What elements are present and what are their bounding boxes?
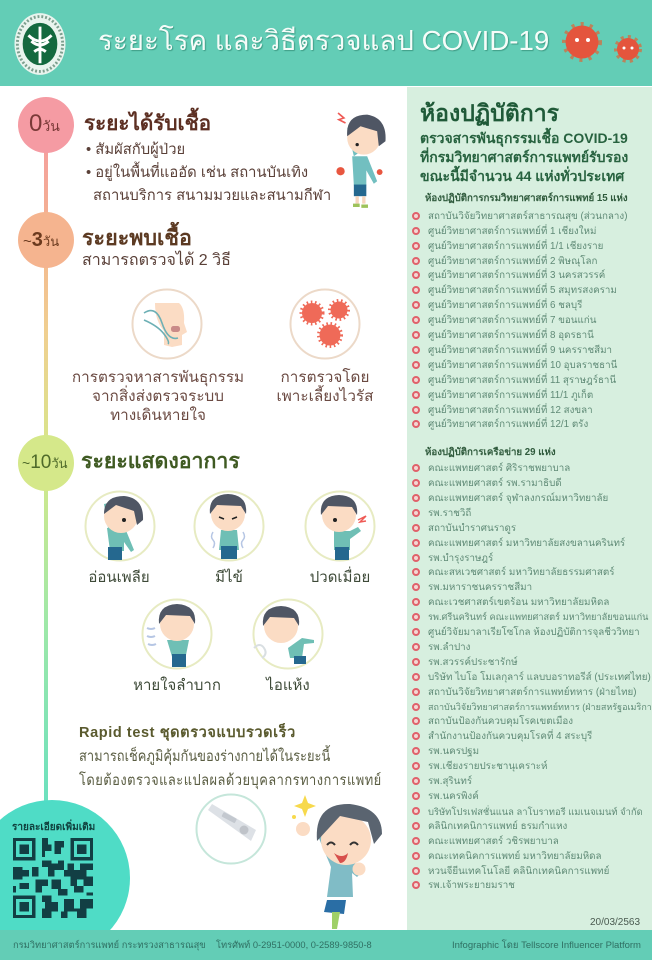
list: network labs: คณะเทคนิคการแพทย์ มหาวิทยาลัยมหิดล (428, 851, 602, 862)
icon: QR code (13, 838, 93, 918)
text: exposure bullets (86, 142, 331, 204)
icon: happy boy (292, 795, 382, 929)
list: department labs: ศูนย์วิทยาศาสตร์การแพทย์ที่ 8 อุดรธานี (428, 330, 594, 341)
symptom: dry cough (252, 598, 324, 670)
footer credit: Infographic โดย Tellscore Influencer Platform (452, 940, 641, 951)
label: shortness of breath: หายใจลำบาก (133, 677, 221, 694)
list: network labs: คณะแพทยศาสตร์ วชิรพยาบาล (428, 836, 559, 847)
text: rapid test description (79, 745, 382, 790)
label: dry cough: ไอแห้ง (266, 677, 310, 694)
list: network labs: สถาบันป้องกันควบคุมโรคเขตเมือง (428, 716, 573, 727)
list: network labs: รพ.เจ้าพระยายมราช (428, 880, 515, 891)
icon: ministry of public health seal (14, 13, 66, 75)
lab subheading (420, 128, 628, 184)
label: virus culture: การตรวจโดย (281, 369, 369, 386)
list: department labs: ศูนย์วิทยาศาสตร์การแพทย์ที่ 11/1 ภูเก็ต (428, 390, 593, 401)
list: department labs: ศูนย์วิทยาศาสตร์การแพทย์ที่ 10 อุบลราชธานี (428, 360, 617, 371)
text: rapid test description: โดยต้องตรวจและแปลผลด้วยบุคลากรทางการแพทย์ (79, 772, 382, 789)
list: department labs: ศูนย์วิทยาศาสตร์การแพทย์ที่ 5 สมุทรสงคราม (428, 285, 617, 296)
icon: rapid test kit (196, 794, 266, 864)
list: network labs: รพ.นครพิงค์ (428, 791, 479, 802)
list: department labs (412, 210, 627, 430)
label: PCR test: จากสิ่งส่งตรวจระบบ (92, 388, 224, 405)
label: virus culture: เพาะเลี้ยงไวรัส (276, 388, 374, 405)
label: PCR test (72, 369, 244, 424)
list: network labs: สำนักงานป้องกันควบคุมโรคที่ 4 สระบุรี (428, 731, 592, 742)
label: PCR test: ทางเดินหายใจ (110, 407, 206, 424)
title: ระยะโรค และวิธีตรวจแลป COVID-19 (98, 25, 549, 56)
symptom: body aches (304, 490, 376, 562)
list: department labs: ศูนย์วิทยาศาสตร์การแพทย์ที่ 11 สุราษฎร์ธานี (428, 375, 616, 386)
header band (0, 0, 652, 86)
label: more details: รายละเอียดเพิ่มเติม (12, 822, 95, 833)
list: network labs: รพ.สวรรค์ประชารักษ์ (428, 657, 518, 668)
list: department labs: ศูนย์วิทยาศาสตร์การแพทย์ที่ 12/1 ตรัง (428, 419, 588, 430)
list: department labs: ศูนย์วิทยาศาสตร์การแพทย์ที่ 12 สงขลา (428, 405, 593, 416)
list: network labs: บริษัทโปรเฟสชั่นแนล ลาโบราทอรี แมเนจเมนท์ จำกัด (428, 806, 643, 817)
timeline line (44, 125, 48, 815)
list: network labs: บริษัท ไบโอ โมเลกุลาร์ แลบบอราทอรีส์ (ประเทศไทย) (428, 672, 651, 683)
date stamp: 20/03/2563 (590, 917, 640, 928)
label: virus culture (276, 368, 374, 405)
list: network labs: ศูนย์วิจัยมาลาเรียโซโกล ห้องปฏิบัติการจุลชีววิทยา (428, 627, 640, 638)
heading: detection phase: ระยะพบเชื้อ (82, 226, 192, 250)
list: network labs: คณะสหเวชศาสตร์ มหาวิทยาลัยธรรมศาสตร์ (428, 567, 615, 578)
text: exposure bullets: • สัมผัสกับผู้ป่วย (86, 142, 185, 158)
list: department labs: ศูนย์วิทยาศาสตร์การแพทย์ที่ 9 นครราชสีมา (428, 345, 612, 356)
list: network labs: รพ.เชียงรายประชานุเคราะห์ (428, 761, 547, 772)
footer contact: กรมวิทยาศาสตร์การแพทย์ กระทรวงสาธารณสุข โทรศัพท์ 0-2951-0000, 0-2589-9850-8 (13, 940, 372, 950)
list: network labs: รพ.สุรินทร์ (428, 776, 472, 787)
label: PCR test: การตรวจหาสารพันธุกรรม (72, 369, 244, 386)
symptom: shortness of breath (142, 598, 212, 670)
heading: rapid test: Rapid test ชุดตรวจแบบรวดเร็ว (79, 725, 296, 741)
badge: day 10 (18, 435, 74, 491)
icon: boy with headache, top right (336, 112, 386, 208)
list: network labs: รพ.ราชวิถี (428, 508, 471, 519)
symptom: fever (194, 490, 264, 562)
heading: exposure phase: ระยะได้รับเชื้อ (84, 112, 211, 135)
icon: DNA circle (132, 288, 202, 360)
badge: day 0 (18, 97, 74, 153)
list: network labs: สถาบันวิจัยวิทยาศาสตร์การแพทย์ทหาร (ฝ่ายสหรัฐอเมริกา) (428, 702, 652, 712)
text: exposure bullets: • อยู่ในพื้นที่แออัด เช่น สถานบันเทิง (86, 165, 308, 181)
badge: day 0: 0วัน (29, 110, 60, 137)
list: department labs: ศูนย์วิทยาศาสตร์การแพทย์ที่ 2 พิษณุโลก (428, 256, 597, 267)
footer band (0, 930, 652, 960)
label: fever: มีไข้ (215, 569, 243, 586)
list: department labs: สถาบันวิจัยวิทยาศาสตร์สาธารณสุข (ส่วนกลาง) (428, 211, 627, 222)
list: network labs: สถาบันบำราศนราดูร (428, 523, 516, 534)
list: network labs: รพ.นครปฐม (428, 746, 479, 757)
text: rapid test description: สามารถเช็คภูมิคุ้มกันของร่างกายได้ในระยะนี้ (79, 748, 330, 765)
list: network labs: คณะแพทยศาสตร์ รพ.รามาธิบดี (428, 478, 562, 489)
list: network labs: คลินิกเทคนิการแพทย์ ธรมกำแหง (428, 821, 567, 832)
text: two test methods: สามารถตรวจได้ 2 วิธี (82, 252, 231, 269)
list: department labs: ศูนย์วิทยาศาสตร์การแพทย์ที่ 6 ชลบุรี (428, 300, 582, 311)
list: department labs: ศูนย์วิทยาศาสตร์การแพทย์ที่ 1/1 เชียงราย (428, 241, 603, 252)
list: department labs: ศูนย์วิทยาศาสตร์การแพทย์ที่ 3 นครสวรรค์ (428, 270, 605, 281)
badge: day 10: ~10วัน (22, 452, 68, 473)
list: department labs: ศูนย์วิทยาศาสตร์การแพทย์ที่ 7 ขอนแก่น (428, 315, 596, 326)
list: department labs: ศูนย์วิทยาศาสตร์การแพทย์ที่ 1 เชียงใหม่ (428, 226, 596, 237)
list: network labs: คณะแพทยศาสตร์ จุฬาลงกรณ์มหาวิทยาลัย (428, 493, 608, 504)
lab heading: ห้องปฏิบัติการ (420, 100, 559, 126)
badge: day 3: ~3วัน (23, 229, 59, 251)
list: network labs: รพ.บำรุงราษฎร์ (428, 553, 493, 564)
lab subheading: ขณะนี้มีจำนวน 44 แห่งทั่วประเทศ (420, 168, 624, 184)
list: network labs: คณะเวชศาสตร์เขตร้อน มหาวิทยาลัยมหิดล (428, 597, 609, 608)
list: network labs: รพ.ลำปาง (428, 642, 470, 653)
symptom: fatigue (84, 490, 156, 562)
list: network labs: คณะแพทยศาสตร์ มหาวิทยาลัยสงขลานครินทร์ (428, 538, 625, 549)
list heading: department labs: ห้องปฏิบัติการกรมวิทยาศาสตร์การแพทย์ 15 แห่ง (425, 193, 628, 204)
label: body aches: ปวดเมื่อย (310, 569, 370, 586)
list heading: network labs: ห้องปฏิบัติการเครือข่าย 29 แห่ง (425, 447, 556, 458)
lab subheading: ตรวจสารพันธุกรรมเชื้อ COVID-19 (420, 130, 628, 146)
text: exposure bullets: สถานบริการ สนามมวยและสนามกีฬา (93, 188, 331, 204)
icon: virus mascots (562, 22, 642, 63)
list: network labs: หวนจียีนเทคโนโลยี คลินิกเทคนิคการแพทย์ (428, 866, 609, 877)
list: network labs: รพ.มหาราชนครราชสีมา (428, 582, 532, 593)
list: network labs: คณะแพทยศาสตร์ ศิริราชพยาบาล (428, 463, 570, 474)
panel: laboratories (407, 87, 652, 930)
list: network labs (412, 462, 652, 891)
label: fatigue: อ่อนเพลีย (88, 569, 150, 586)
lab subheading: ที่กรมวิทยาศาสตร์การแพทย์รับรอง (420, 149, 628, 165)
list: network labs: สถาบันวิจัยวิทยาศาสตร์การแพทย์ทหาร (ฝ่ายไทย) (428, 687, 637, 698)
QR panel (0, 800, 130, 956)
list: network labs: รพ.ศรีนครินทร์ คณะแพทยศาสตร์ มหาวิทยาลัยขอนแก่น (428, 612, 648, 622)
badge: day 3 (18, 212, 74, 268)
icon: virus culture circle (290, 288, 360, 360)
heading: symptom phase: ระยะแสดงอาการ (81, 449, 240, 473)
